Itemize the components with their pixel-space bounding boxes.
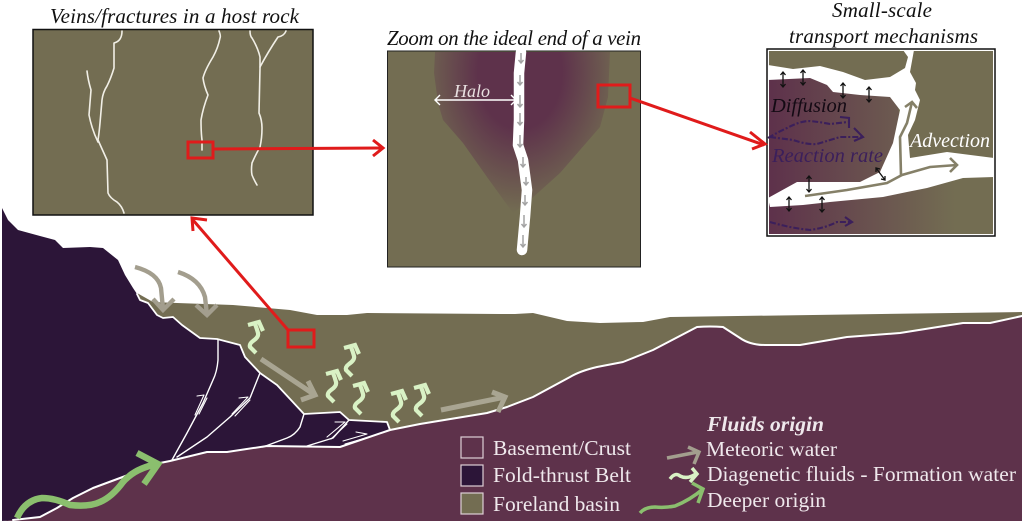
cross-section: fold-thrust belt [2, 208, 390, 521]
arrow: meteoric water through the basin [261, 359, 505, 412]
label: diagenetic fluids: Diagenetic fluids - Formation water [707, 462, 1016, 486]
legend: fluids origin [640, 412, 1016, 513]
heading: transport mechanisms panel: transport mechanisms [789, 24, 978, 48]
heading: veins panel: Veins/fractures in a host rock [50, 4, 300, 28]
white fractures [768, 50, 994, 207]
heading: transport mechanisms panel [789, 0, 978, 48]
panel: veins in host rock [33, 30, 313, 215]
swatch: foreland basin [461, 493, 483, 514]
heading: vein end panel: Zoom on the ideal end of a vein [387, 27, 641, 50]
label: halo: Halo [453, 81, 490, 101]
arrow: meteoric water entering the basin [135, 267, 217, 315]
halo [434, 52, 610, 213]
legend heading: Fluids origin [706, 412, 824, 436]
cross-section: basement crust [2, 316, 1022, 521]
label: fold-thrust belt: Fold-thrust Belt [493, 463, 631, 487]
red zoom box on cross-section with arrow to veins panel [192, 218, 314, 347]
downward flow arrows in the vein [518, 53, 528, 247]
legend: geological units [461, 436, 631, 516]
icon: diagenetic squiggle [670, 468, 697, 482]
label: meteoric water: Meteoric water [706, 437, 837, 461]
halo width arrow [435, 95, 516, 105]
icons: diagenetic fluid squiggles [248, 322, 429, 422]
swatch: basement [461, 437, 483, 458]
label: advection: Advection [908, 130, 990, 152]
white contact lines and thrust faults [13, 294, 1022, 520]
olive upper strip and right block [769, 51, 993, 158]
cross-section: foreland basin [137, 293, 1022, 430]
label: diffusion: Diffusion [770, 95, 847, 117]
icon: deeper origin arrow [640, 483, 703, 513]
label: basement: Basement/Crust [493, 436, 631, 460]
label: deeper origin: Deeper origin [707, 488, 826, 512]
veins network [87, 31, 286, 213]
panel: small-scale transport mechanisms [767, 49, 995, 236]
label: reaction rate: Reaction rate [771, 145, 883, 167]
red zoom box in halo with arrow to transport panel [598, 85, 765, 149]
icon: meteoric arrow [667, 447, 699, 464]
diffusion double arrows [780, 70, 885, 212]
advection arrows [805, 102, 957, 196]
arrow: deeper origin fluid [17, 453, 158, 518]
vein [518, 52, 527, 250]
swatch: fold-thrust belt [461, 465, 483, 486]
panel: ideal end of a vein [388, 51, 640, 267]
reaction rate dash-dot arrows [768, 117, 863, 230]
label: foreland basin: Foreland basin [493, 492, 620, 516]
red zoom box in veins panel with arrow to vein end panel [188, 140, 383, 158]
